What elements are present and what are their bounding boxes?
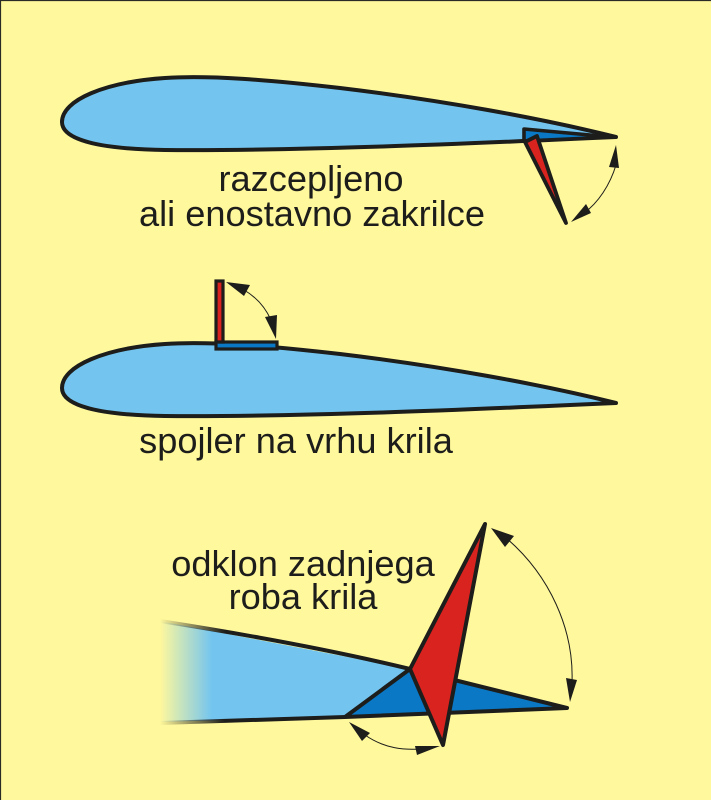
deflected trailing wedge — [345, 669, 567, 717]
label: trailing edge deflection line 1: odklon zadnjega — [171, 543, 436, 584]
raised spoiler — [216, 281, 223, 342]
label: simple flap: ali enostavno zakrilce — [139, 193, 485, 234]
angle arrow — [226, 282, 277, 339]
deflected flap — [525, 136, 566, 223]
spoiler recess — [216, 342, 277, 349]
lower angle arrow — [349, 722, 440, 755]
wing section fading — [160, 621, 410, 722]
lower outline — [160, 717, 345, 723]
upper angle arrow — [491, 528, 577, 702]
red deflected surface — [410, 524, 485, 745]
label: spoiler: spojler na vrhu krila — [139, 420, 454, 461]
angle arrow — [571, 145, 619, 222]
flap recess — [524, 129, 612, 141]
diagram: split flap airfoil — [62, 77, 619, 223]
label: split flap: razcepljeno — [218, 158, 404, 199]
upper outline — [160, 621, 410, 669]
airfoil body — [62, 343, 616, 416]
diagram: trailing edge deflection — [160, 524, 577, 755]
airfoil body — [62, 77, 616, 150]
diagram: spoiler on top of wing — [62, 281, 616, 416]
label: trailing edge deflection line 2: roba krila — [229, 576, 378, 617]
